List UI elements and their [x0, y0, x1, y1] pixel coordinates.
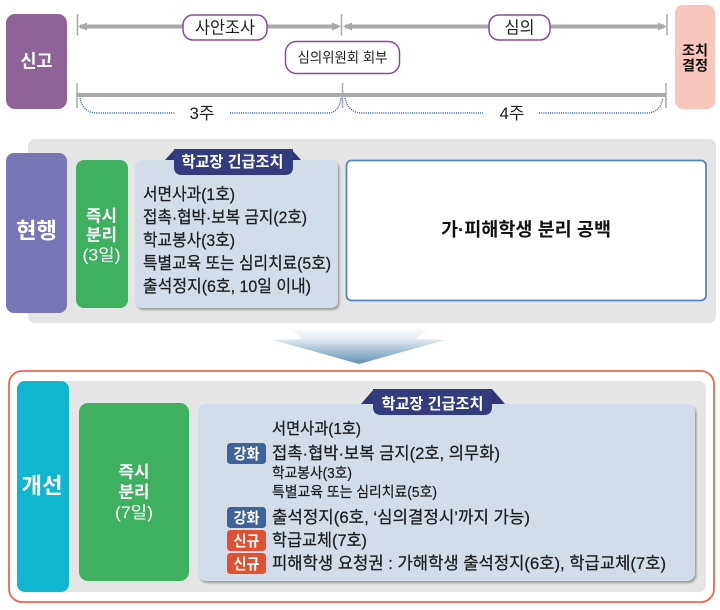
panel: principal emergency measures improved	[198, 389, 695, 581]
measures list: 서면사과(1호)	[272, 420, 361, 438]
label: current	[6, 153, 67, 313]
timeline: duration bar	[77, 83, 666, 123]
box: immediate separation 3 days: 분리	[86, 226, 117, 244]
box: immediate separation 7 days: (7일)	[115, 503, 153, 522]
box: separation gap	[346, 160, 706, 300]
measures list: 출석정지(6호, 10일 이내)	[143, 277, 311, 296]
label: committee referral	[286, 42, 400, 74]
measures list: 특별교육 또는 심리치료(5호)	[272, 484, 437, 501]
panel: current system	[6, 139, 716, 323]
ribbon heading: 학교장 긴급조치	[182, 153, 284, 171]
box: action decision: 조치	[682, 42, 708, 58]
box: immediate separation 7 days: 분리	[118, 482, 150, 502]
box: separation gap: 가·피해학생 분리 공백	[441, 219, 611, 240]
badge: new	[227, 553, 266, 574]
label: investigation: 사안조사	[195, 18, 255, 38]
measures list: 접촉·협박·보복 금지(2호)	[143, 208, 307, 227]
ribbon heading	[165, 149, 301, 175]
badge: strengthened: 강화	[234, 446, 260, 463]
measures list: 학교봉사(3호)	[272, 465, 352, 482]
measures list: 서면사과(1호)	[143, 185, 235, 204]
measures list: 접촉·협박·보복 금지(2호, 의무화)	[272, 444, 500, 463]
box: action decision	[675, 5, 715, 109]
panel: improved system	[9, 371, 714, 602]
box: report step: 신고	[20, 52, 52, 72]
box: immediate separation 3 days: 즉시	[86, 208, 117, 226]
measures list: 출석정지(6호, ‘심의결정시’까지 가능)	[272, 508, 530, 527]
badge: strengthened	[227, 443, 266, 464]
box: immediate separation 3 days	[76, 160, 128, 308]
arrow: down	[273, 327, 445, 364]
measures list: 특별교육 또는 심리치료(5호)	[143, 254, 331, 273]
badge: strengthened: 강화	[234, 510, 260, 527]
panel: principal emergency measures	[135, 149, 338, 308]
measures list	[272, 420, 666, 573]
label: review: 심의	[504, 18, 534, 38]
label: investigation	[183, 15, 267, 40]
label: 3 weeks: 3주	[190, 104, 214, 123]
box: immediate separation 7 days: 즉시	[118, 464, 150, 482]
measures list: 학교봉사(3호)	[143, 231, 235, 250]
measures list	[143, 185, 331, 296]
timeline: investigation and review arrows	[78, 14, 667, 40]
measures list: 학급교체(7호)	[272, 531, 367, 550]
box: immediate separation 3 days: (3일)	[82, 246, 120, 264]
ribbon heading	[361, 389, 505, 415]
badge: new: 신규	[234, 556, 260, 573]
label: improvement: 개선	[22, 474, 62, 498]
label: review	[489, 15, 550, 40]
box: report step	[6, 14, 67, 109]
label: committee referral: 심의위원회 회부	[298, 50, 388, 66]
label: 4 weeks: 4주	[500, 104, 524, 123]
box: action decision: 결정	[682, 58, 708, 74]
measures list: 피해학생 요청권 : 가해학생 출석정지(6호), 학급교체(7호)	[272, 554, 666, 573]
badge: new: 신규	[234, 533, 260, 550]
label: improvement	[17, 381, 69, 592]
label: current: 현행	[16, 218, 57, 244]
badge: strengthened	[227, 507, 266, 528]
badge: new	[227, 530, 266, 551]
box: immediate separation 7 days	[79, 403, 189, 581]
ribbon heading: 학교장 긴급조치	[382, 395, 484, 413]
